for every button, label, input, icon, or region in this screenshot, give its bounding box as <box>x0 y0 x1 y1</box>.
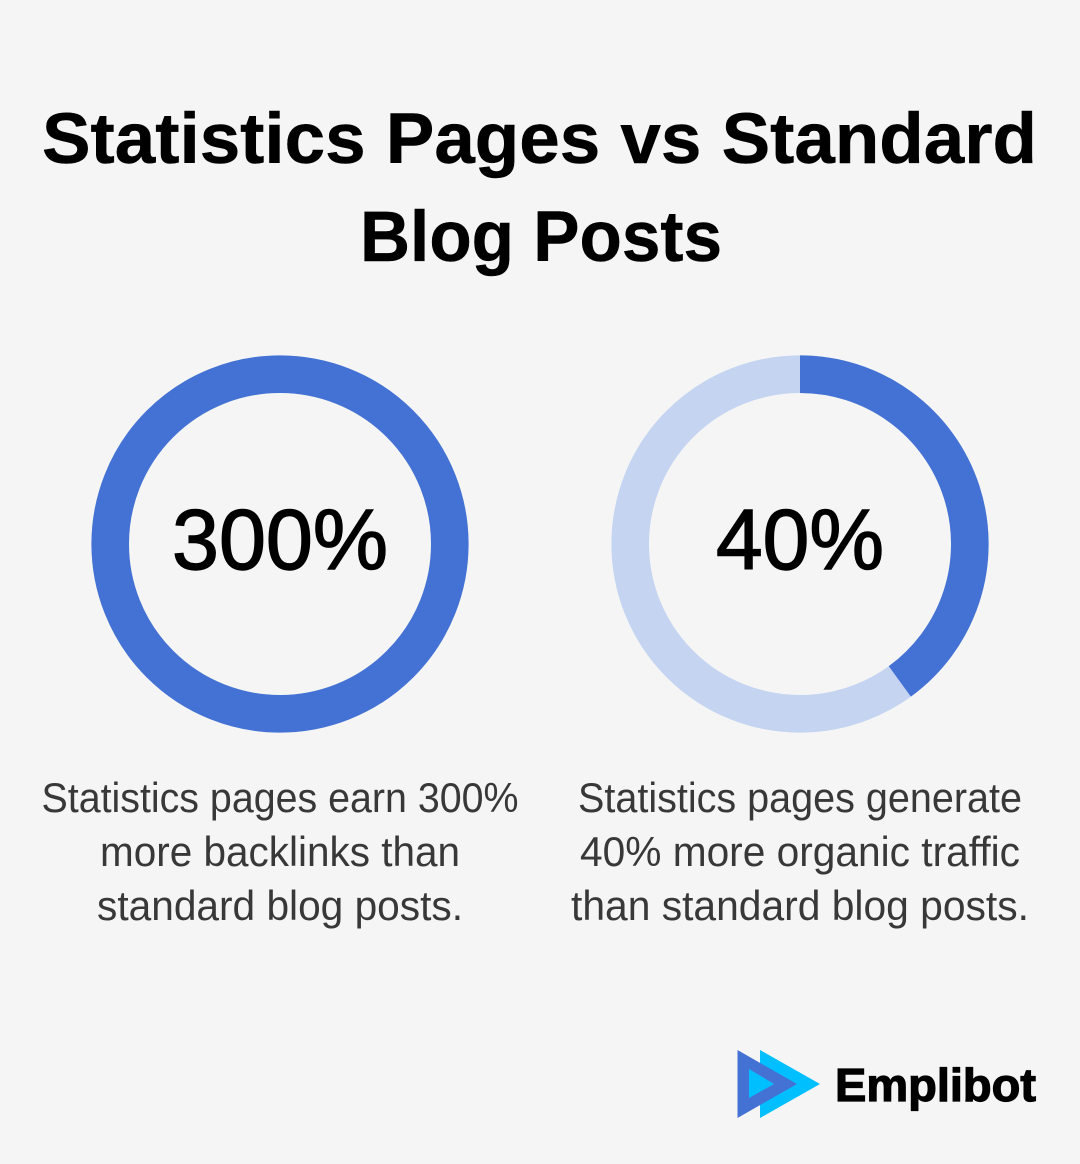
title <box>42 100 1037 277</box>
logo: Emplibot <box>738 1050 1036 1118</box>
panel: backlinks statistic <box>42 374 518 929</box>
title: Statistics Pages vs Standard <box>42 100 1037 179</box>
description: backlinks <box>42 774 518 929</box>
panel: organic traffic statistic <box>571 374 1029 929</box>
description: backlinks: more backlinks than <box>100 828 460 875</box>
description: organic traffic: 40% more organic traffic <box>580 828 1020 875</box>
description: backlinks: standard blog posts. <box>97 882 463 929</box>
icon: play triangles <box>738 1050 820 1118</box>
description: organic traffic: than standard blog posts. <box>571 882 1029 929</box>
donut chart: 40%: 40% <box>716 493 884 588</box>
title: Blog Posts <box>360 198 722 277</box>
description: backlinks: Statistics pages earn 300% <box>42 774 518 821</box>
description: organic traffic: Statistics pages generate <box>578 774 1022 821</box>
donut chart: 40% <box>630 374 970 714</box>
wordmark: Emplibot <box>835 1059 1036 1111</box>
description: organic traffic <box>571 774 1029 929</box>
donut chart: 300%: 300% <box>172 493 388 588</box>
donut chart: 300% <box>110 374 450 714</box>
